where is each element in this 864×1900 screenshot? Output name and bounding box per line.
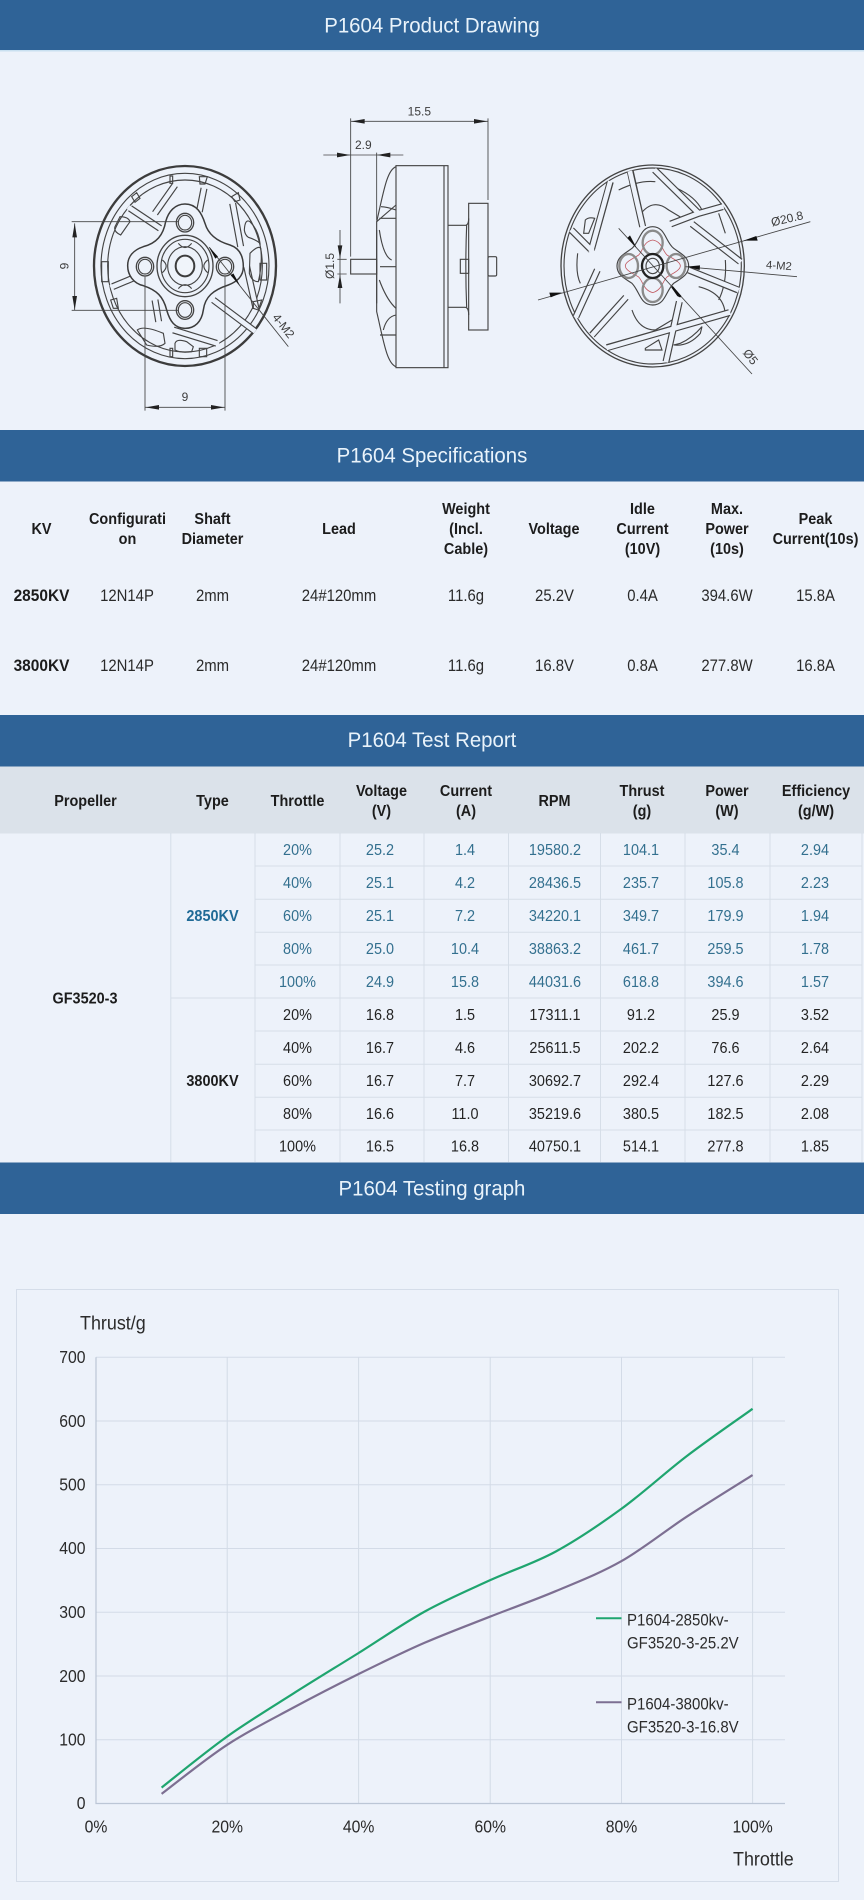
test rows 2850KV: 394.6 [707,973,744,991]
dimension: 2.9 [323,138,403,220]
test table header row: Power [705,782,749,800]
test rows 2850KV: 20% [283,841,312,859]
spec row 2850KV: 15.8A [796,587,836,605]
test rows 3800KV: 1.85 [801,1138,829,1156]
table: test report [0,766,864,1162]
dimension: 4-M2 [685,259,797,277]
dimension: shaft 1.5 [323,230,347,303]
test table header row: Type [196,792,229,810]
spec row 2850KV: 394.6W [701,587,753,605]
spec row 3800KV: 0.8A [627,657,658,675]
spec row 3800KV: 16.8A [796,657,836,675]
test rows 3800KV: 4.6 [455,1039,475,1057]
spec row 3800KV [14,656,836,675]
spec table header row: Cable) [444,540,488,558]
test rows 2850KV: 60% [283,907,312,925]
spec row 2850KV: 2850KV [14,586,70,605]
spec table header row: Current(10s) [773,530,858,548]
dimension: horizontal 9: 9 [182,390,189,404]
test rows 2850KV: 44031.6 [529,973,581,991]
test rows 2850KV [279,841,829,991]
test rows 2850KV: 1.78 [801,940,829,958]
drawing: rear view of motor bell [538,165,810,374]
test rows 3800KV: 16.5 [366,1138,394,1156]
test table header row: (A) [456,802,476,820]
y axis labels: 100 [59,1730,85,1750]
test rows 2850KV: 1.4 [455,841,475,859]
x axis title: Throttle [733,1848,794,1870]
test rows 3800KV: 25611.5 [529,1039,581,1057]
type cell 2850KV: 2850KV [186,907,239,925]
test rows 2850KV: 25.1 [366,907,394,925]
test table header row: (W) [715,802,739,820]
x axis labels [85,1817,773,1837]
y axis labels: 500 [59,1475,85,1495]
test rows 2850KV: 618.8 [623,973,659,991]
test rows 2850KV: 28436.5 [529,874,581,892]
y axis labels: 0 [77,1793,85,1813]
spec row 3800KV: 3800KV [14,656,70,675]
y axis labels: 200 [59,1666,85,1686]
spec table header row: Peak [799,510,833,528]
test rows 2850KV: 15.8 [451,973,479,991]
dimension: diameter 5 [619,228,761,374]
test rows 2850KV: 10.4 [451,940,479,958]
y axis labels: 400 [59,1538,85,1558]
test rows 3800KV: 3.52 [801,1006,829,1024]
spec row 2850KV: 24#120mm [302,587,376,605]
test table header row: Propeller [54,792,117,810]
legend: 2850kv [596,1612,739,1653]
test rows 3800KV: 16.6 [366,1105,394,1123]
test rows 2850KV: 24.9 [366,973,394,991]
spec row 3800KV: 277.8W [701,657,753,675]
spec row 2850KV: 12N14P [100,587,154,605]
test rows 3800KV: 16.8 [451,1138,479,1156]
test table header row: RPM [538,792,571,810]
test rows 2850KV: 349.7 [623,907,659,925]
test rows 3800KV: 100% [279,1138,316,1156]
dimension: 4-M2 leader [209,247,298,347]
spec row 3800KV: 2mm [196,657,229,675]
header: test report: P1604 Test Report [348,729,517,752]
test rows 3800KV: 277.8 [707,1138,744,1156]
spec table header row: Shaft [194,510,231,528]
test rows 3800KV: 40750.1 [529,1138,581,1156]
drawing: front view of motor base [57,166,298,411]
test rows 2850KV: 40% [283,874,312,892]
test rows 3800KV: 91.2 [627,1006,655,1024]
test rows 2850KV: 38863.2 [529,940,581,958]
spec row 2850KV: 0.4A [627,587,658,605]
dimension: diameter 5: Ø5 [740,346,761,368]
dimension: 15.5: 15.5 [408,104,431,118]
test rows 3800KV: 16.7 [366,1072,394,1090]
test rows 3800KV: 35219.6 [529,1105,581,1123]
dimension: horizontal 9 [145,277,225,411]
test rows 2850KV: 35.4 [711,841,740,859]
y axis labels: 300 [59,1602,85,1622]
test rows 3800KV: 1.5 [455,1006,475,1024]
test rows 2850KV: 461.7 [623,940,659,958]
test rows 2850KV: 34220.1 [529,907,581,925]
dimension: diameter 20.8: Ø20.8 [770,208,805,229]
spec row 2850KV: 25.2V [535,587,575,605]
test rows 2850KV: 1.57 [801,973,829,991]
test rows 3800KV: 80% [283,1105,312,1123]
test rows 3800KV: 182.5 [707,1105,744,1123]
legend: 2850kv: P1604-2850kv- [627,1612,729,1630]
test rows 2850KV: 105.8 [707,874,744,892]
test rows 3800KV: 292.4 [623,1072,659,1090]
dimension: 4-M2 leader: 4-M2 [270,311,298,341]
test rows 3800KV: 2.08 [801,1105,829,1123]
test rows 3800KV: 25.9 [711,1006,740,1024]
test rows 3800KV: 2.29 [801,1072,829,1090]
y axis title: Thrust/g [80,1312,146,1334]
header: testing graph: P1604 Testing graph [339,1177,525,1201]
x axis labels: 40% [343,1817,375,1837]
test rows 2850KV: 259.5 [707,940,744,958]
test table header row: Voltage [356,782,407,800]
legend: 3800kv [596,1696,739,1737]
legend: 3800kv: P1604-3800kv- [627,1696,729,1714]
legend: 3800kv: GF3520-3-16.8V [627,1719,739,1737]
test rows 3800KV: 20% [283,1006,312,1024]
test rows 3800KV: 40% [283,1039,312,1057]
spec table header row [31,500,858,558]
test table header row: (V) [372,802,391,820]
test table header row: Thrust [620,782,664,800]
header: product drawing [0,0,864,52]
spec table header row: Current [616,520,669,538]
drawing: side view of motor [323,104,497,368]
test rows 2850KV: 4.2 [455,874,475,892]
panel: line chart of thrust vs throttle [16,1290,838,1882]
spec table header row: Configurati [89,510,166,528]
x axis labels: 60% [474,1817,506,1837]
type cell 3800KV: 3800KV [186,1072,239,1090]
test rows 2850KV: 235.7 [623,874,659,892]
header: product drawing: P1604 Product Drawing [324,14,540,38]
legend: 2850kv: GF3520-3-25.2V [627,1635,739,1653]
test table header row: (g) [633,802,651,820]
test table header row: Current [440,782,492,800]
spec row 2850KV: 11.6g [448,587,484,605]
dimension: 15.5 [351,104,488,257]
line: 2850kv thrust [162,1409,753,1788]
spec table header row: Max. [711,500,743,518]
dimension: shaft 1.5: Ø1.5 [323,253,337,279]
y axis labels: 700 [59,1347,85,1367]
test rows 2850KV: 104.1 [623,841,659,859]
spec row 2850KV: 2mm [196,587,229,605]
test table header row: (g/W) [798,802,834,820]
x axis labels: 80% [606,1817,637,1837]
spec table header row: (Incl. [449,520,483,538]
panel: product drawing [57,104,810,411]
spec table header row: on [119,530,136,548]
test rows 3800KV: 202.2 [623,1039,659,1057]
dimension: 4-M2: 4-M2 [766,259,792,273]
test rows 2850KV: 19580.2 [529,841,581,859]
spec table header row: (10V) [625,540,660,558]
test rows 3800KV: 17311.1 [529,1006,581,1024]
test rows 3800KV: 16.8 [366,1006,394,1024]
test rows 3800KV: 514.1 [623,1138,659,1156]
test rows 2850KV: 7.2 [455,907,475,925]
propeller cell: GF3520-3 [52,990,118,1008]
dimension: vertical 9: 9 [57,262,71,269]
line: 3800kv thrust [162,1475,753,1794]
spec table header row: Diameter [182,530,244,548]
test rows 2850KV: 25.0 [366,940,394,958]
header: specifications: P1604 Specifications [337,444,527,468]
test rows 3800KV: 7.7 [455,1072,475,1090]
test rows 2850KV: 80% [283,940,312,958]
header: testing graph [0,1162,864,1214]
spec row 3800KV: 24#120mm [302,657,376,675]
test rows 2850KV: 25.1 [366,874,394,892]
test rows 3800KV: 127.6 [707,1072,744,1090]
test rows 2850KV: 179.9 [707,907,744,925]
spec table header row: Power [705,520,749,538]
test rows 3800KV: 16.7 [366,1039,394,1057]
dimension: 2.9: 2.9 [355,138,372,152]
spec row 3800KV: 11.6g [448,657,484,675]
test rows 2850KV: 100% [279,973,316,991]
y axis labels: 600 [59,1411,85,1431]
y axis labels [59,1347,85,1813]
spec table header row: Lead [322,520,356,538]
spec row 3800KV: 12N14P [100,657,154,675]
spec table header row: Idle [630,500,655,518]
test rows 2850KV: 2.23 [801,874,829,892]
test table header row: Efficiency [782,782,851,800]
test table header row [0,766,864,834]
header: test report [0,715,864,766]
test rows 3800KV: 76.6 [711,1039,740,1057]
header: specifications [0,430,864,482]
spec table header row: Weight [442,500,490,518]
dimension: diameter 20.8 [538,208,810,300]
spec table header row: KV [31,520,52,538]
test rows 3800KV: 380.5 [623,1105,659,1123]
test rows 2850KV: 2.94 [801,841,829,859]
test table header row: Throttle [271,792,324,810]
test rows 3800KV: 11.0 [451,1105,479,1123]
spec table header row: Voltage [528,520,580,538]
table: specifications [14,500,858,675]
x axis labels: 100% [732,1817,773,1837]
test rows 2850KV: 25.2 [366,841,394,859]
spec row 3800KV: 16.8V [535,657,575,675]
test rows 2850KV: 1.94 [801,907,829,925]
spec row 2850KV [14,586,836,605]
test rows 3800KV [279,1006,829,1156]
test rows 3800KV: 30692.7 [529,1072,581,1090]
test rows 3800KV: 60% [283,1072,312,1090]
spec table header row: (10s) [710,540,744,558]
x axis labels: 0% [85,1817,108,1837]
dimension: vertical 9 [57,222,178,310]
test rows 3800KV: 2.64 [801,1039,829,1057]
x axis labels: 20% [211,1817,243,1837]
